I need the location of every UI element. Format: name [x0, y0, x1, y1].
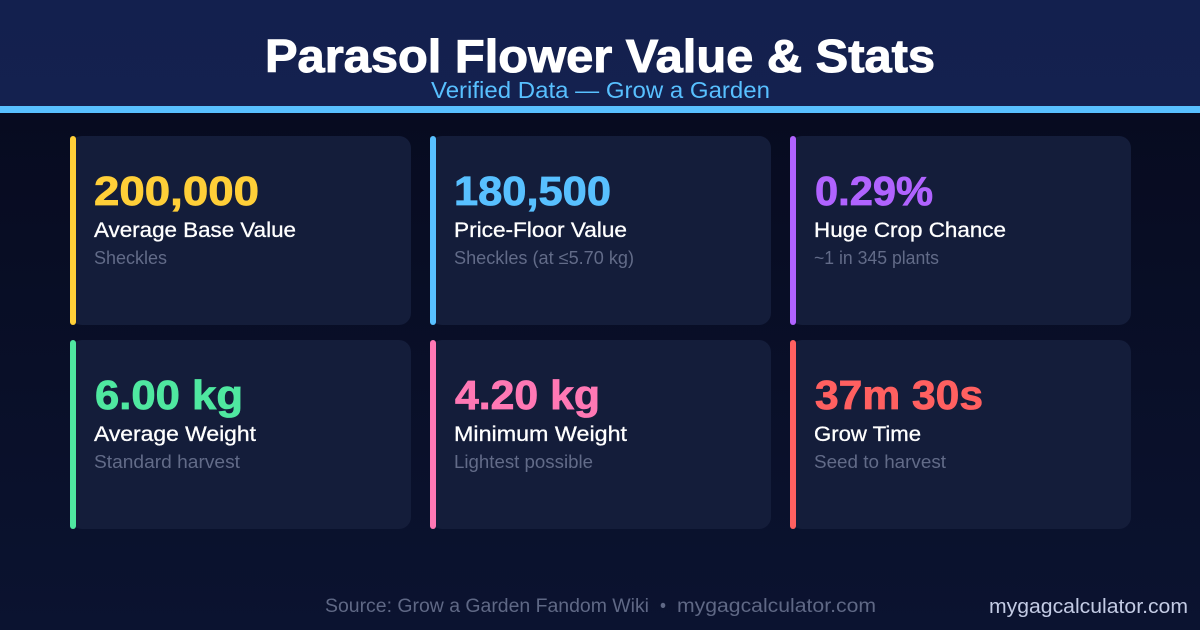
panel: average base value: [70, 136, 411, 325]
watermark: mygagcalculator.com: [989, 596, 1188, 618]
label: Average Weight: [94, 423, 256, 446]
value: 4.20 kg: [455, 372, 600, 418]
value: 37m 30s: [815, 372, 983, 418]
value: 200,000: [94, 168, 259, 214]
value: 6.00 kg: [95, 372, 243, 418]
header band: [0, 0, 1200, 113]
value: 180,500: [454, 168, 611, 214]
title: Parasol Flower Value & Stats: [265, 30, 935, 82]
value: 0.29%: [815, 168, 933, 214]
note: Sheckles (at ≤5.70 kg): [454, 247, 634, 268]
panel: huge crop chance: [790, 136, 1131, 325]
note: ~1 in 345 plants: [814, 247, 939, 268]
footer source line: [325, 596, 876, 617]
label: Minimum Weight: [454, 423, 627, 446]
label: Huge Crop Chance: [814, 219, 1006, 242]
footer source line: mygagcalculator.com: [677, 596, 876, 617]
note: Lightest possible: [454, 451, 593, 472]
panel: price-floor value: [430, 136, 771, 325]
footer source line: Source: Grow a Garden Fandom Wiki: [325, 596, 649, 617]
footer source line: •: [660, 596, 666, 617]
label: Grow Time: [814, 423, 921, 446]
label: Price-Floor Value: [454, 219, 627, 242]
note: Sheckles: [94, 247, 167, 268]
note: Seed to harvest: [814, 451, 946, 472]
panel: minimum weight: [430, 340, 771, 529]
label: Average Base Value: [94, 219, 296, 242]
note: Standard harvest: [94, 451, 240, 472]
subtitle: Verified Data — Grow a Garden: [431, 77, 770, 103]
panel: grow time: [790, 340, 1131, 529]
panel: average weight: [70, 340, 411, 529]
